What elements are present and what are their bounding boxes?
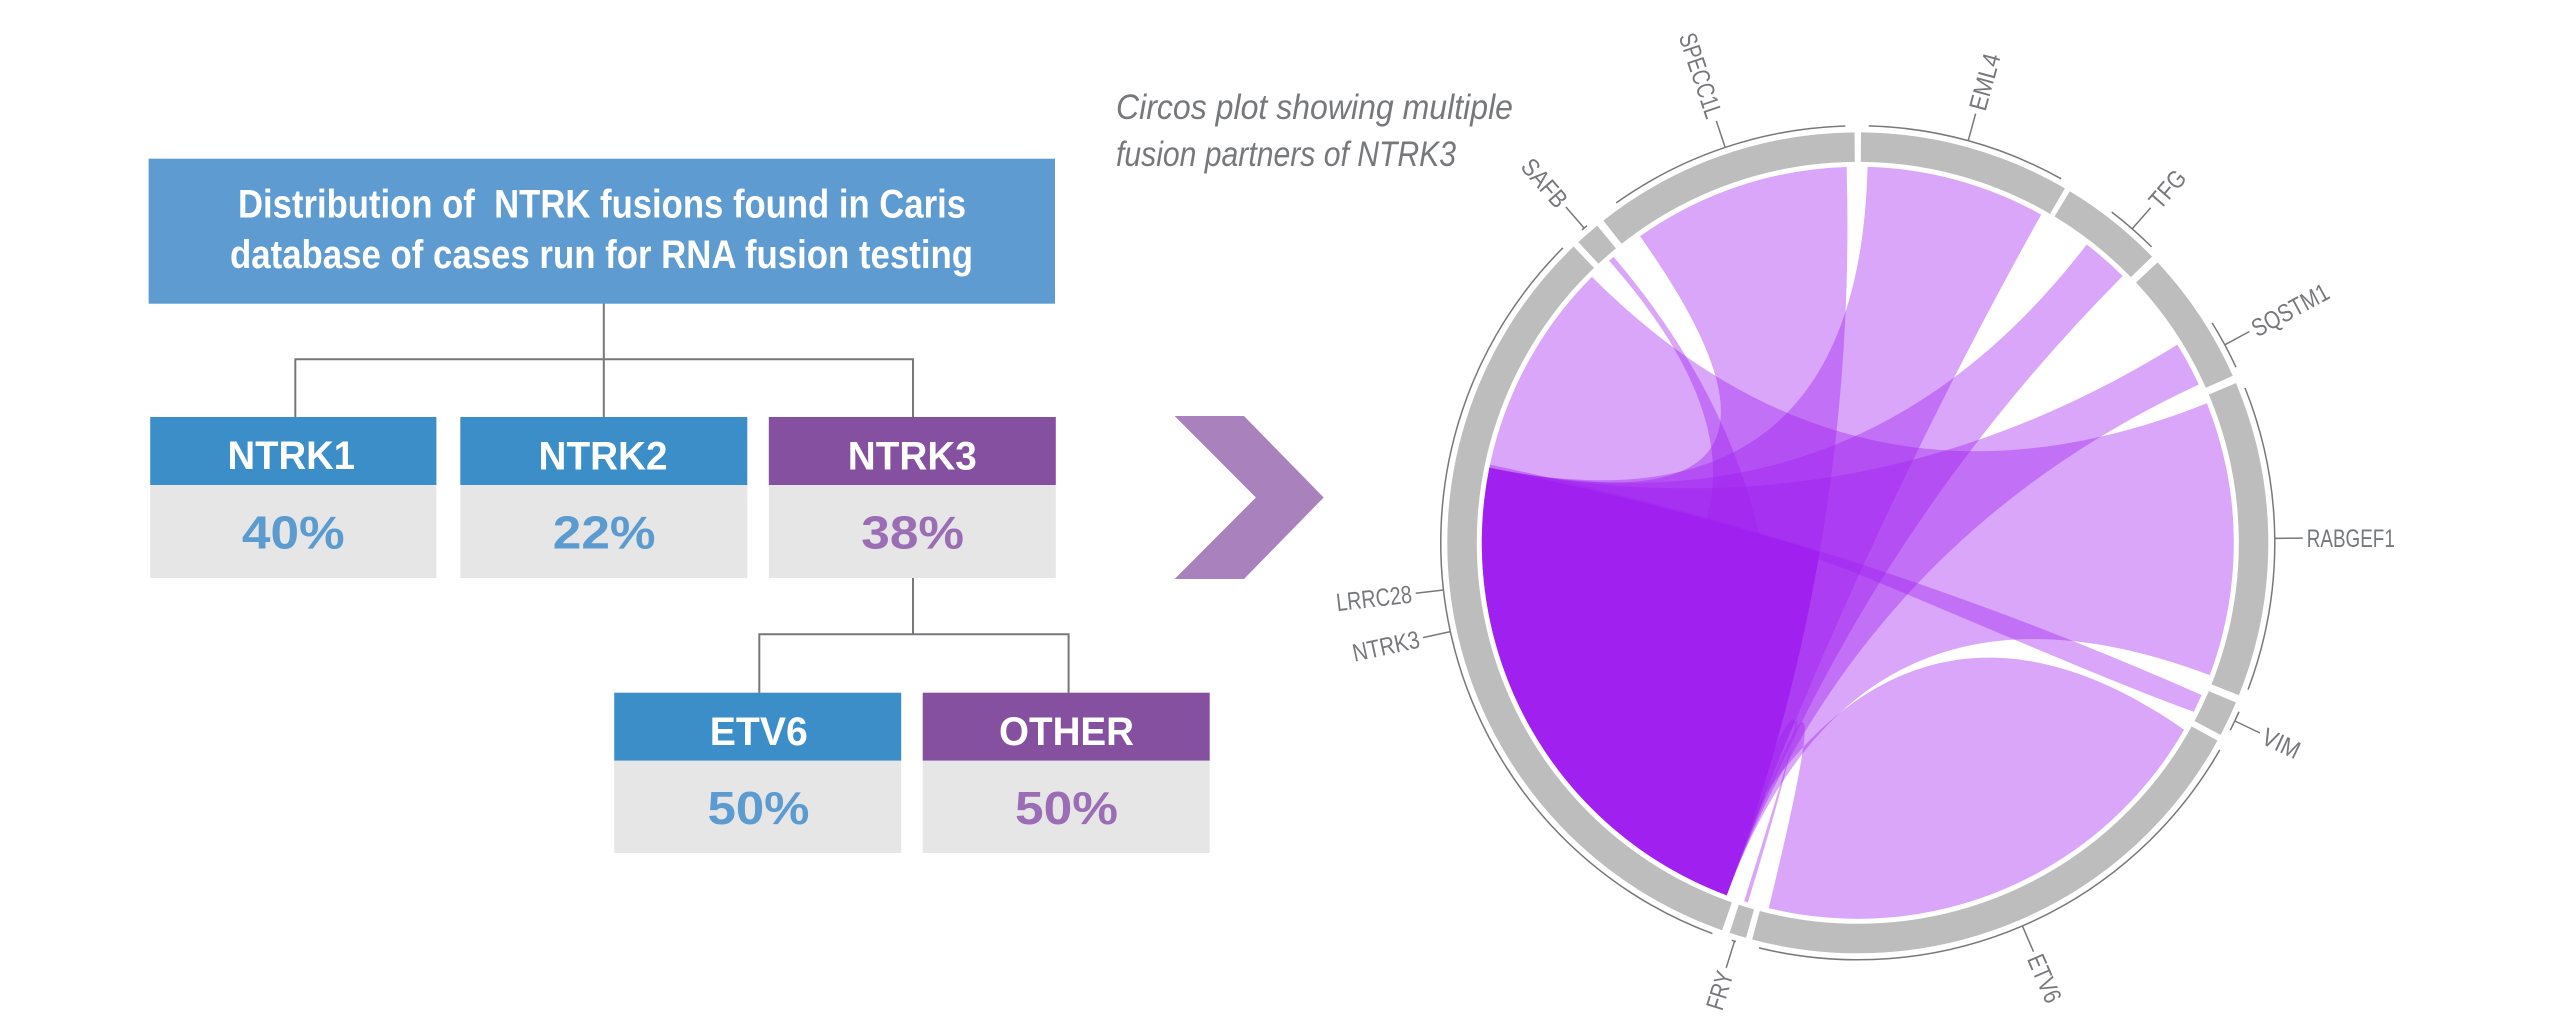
card: ETV6 50% (614, 693, 901, 853)
card: NTRK3 38% (769, 417, 1056, 578)
gene labels: NTRK3 (1350, 626, 1422, 668)
tick arcs and leader lines (1416, 114, 2303, 968)
caption: Circos plot showing multiple (1116, 88, 1513, 127)
heading box (149, 159, 1055, 304)
gene labels: RABGEF1 (2307, 525, 2395, 553)
card: NTRK3 38%: 38% (861, 507, 964, 559)
gene labels: SPECC1L (1673, 30, 1727, 122)
card: NTRK3 38%: NTRK3 (848, 434, 977, 478)
gene labels: ETV6 (2021, 950, 2067, 1007)
arrow: chevron pointing to circos plot (1175, 416, 1324, 579)
ribbon: ETV6 (1711, 658, 2184, 919)
caption (1116, 88, 1513, 174)
card: ETV6 50%: ETV6 (710, 710, 808, 754)
card: NTRK2 22%: 22% (553, 507, 656, 559)
card: OTHER 50% (923, 693, 1210, 853)
card: NTRK1 40% (150, 417, 436, 578)
heading box: Distribution of NTRK fusions found in Caris (238, 183, 966, 227)
ribbon: SPECC1L (1482, 167, 1847, 895)
gene labels: SAFB (1515, 153, 1573, 214)
connectors between boxes (295, 303, 1069, 693)
card: OTHER 50%: OTHER (999, 710, 1134, 754)
caption: fusion partners of NTRK3 (1116, 135, 1456, 174)
card: NTRK2 22% (460, 417, 747, 578)
card: OTHER 50%: 50% (1015, 782, 1118, 834)
circos plot (1335, 30, 2395, 1013)
ribbon core: NTRK3 overlap (1482, 468, 1820, 894)
gene labels: VIM (2257, 723, 2305, 765)
ribbon: RABGEF1 (1482, 277, 2234, 895)
gene labels (1335, 30, 2395, 1013)
ribbons: fusion partners to NTRK3 (1482, 167, 2234, 919)
ribbon: TFG (1482, 244, 2123, 895)
ribbon: EML4 (1482, 167, 2041, 895)
card: ETV6 50%: 50% (708, 782, 810, 834)
ribbon: FRY (1711, 719, 1797, 902)
gene labels: SQSTM1 (2247, 278, 2334, 343)
outer ring segments (1462, 147, 2254, 939)
flowchart: distribution of NTRK fusions (149, 159, 1210, 853)
card: NTRK2 22%: NTRK2 (538, 434, 668, 478)
card: NTRK1 40%: 40% (242, 507, 345, 559)
gene labels: EML4 (1964, 50, 2007, 114)
ribbon: VIM (1489, 465, 2202, 712)
gene labels: FRY (1701, 968, 1739, 1013)
heading box: database of cases run for RNA fusion testing (230, 233, 973, 277)
gene labels: LRRC28 (1335, 581, 1413, 617)
ribbon: SAFB (1512, 257, 1772, 895)
card: NTRK1 40%: NTRK1 (228, 434, 355, 478)
gene labels: TFG (2144, 165, 2192, 215)
ribbon: SQSTM1 (1482, 345, 2199, 895)
